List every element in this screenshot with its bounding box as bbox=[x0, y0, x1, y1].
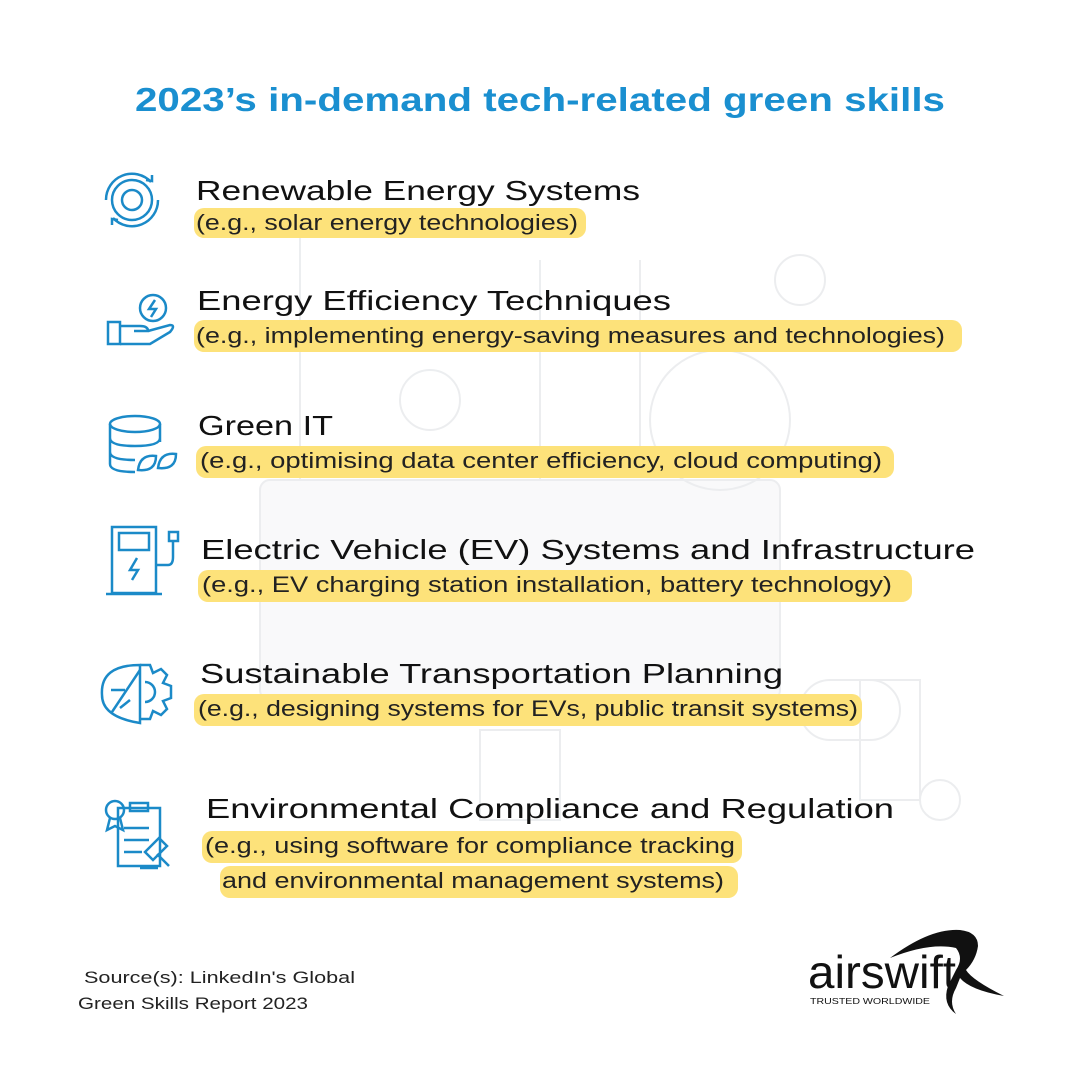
item: renewable energy: (e.g., solar energy technologies) bbox=[196, 210, 578, 235]
item: renewable energy bbox=[106, 174, 640, 238]
source text: Source(s): LinkedIn's Global bbox=[84, 968, 355, 987]
title: 2023’s in-demand tech-related green skills bbox=[135, 81, 945, 118]
icon: gear with leaf bbox=[106, 174, 158, 226]
item: environmental compliance: (e.g., using software for compliance tracking bbox=[205, 833, 735, 858]
source text: Green Skills Report 2023 bbox=[78, 994, 308, 1013]
source text bbox=[78, 968, 355, 1013]
item: environmental compliance bbox=[106, 793, 894, 898]
icon: leaf and gear bbox=[102, 665, 171, 723]
item: renewable energy: Renewable Energy Systems bbox=[196, 175, 640, 206]
item: environmental compliance: Environmental Compliance and Regulation bbox=[206, 793, 894, 824]
item: green IT: Green IT bbox=[198, 410, 333, 441]
logo: airswift: TRUSTED WORLDWIDE bbox=[810, 996, 930, 1006]
item: EV: (e.g., EV charging station installation, battery technology) bbox=[202, 572, 892, 597]
logo: airswift bbox=[808, 930, 1004, 1014]
item: sustainable transport bbox=[102, 658, 862, 726]
background sketch bbox=[260, 230, 960, 820]
logo: airswift: airswift bbox=[808, 946, 956, 998]
item: green IT: (e.g., optimising data center efficiency, cloud computing) bbox=[200, 448, 882, 473]
icon: charging station bbox=[106, 527, 178, 594]
icon: database with leaves bbox=[110, 416, 176, 472]
icon: clipboard with badge and gavel bbox=[106, 801, 169, 868]
item: sustainable transport: Sustainable Transportation Planning bbox=[200, 658, 783, 689]
item: EV bbox=[106, 527, 975, 602]
item: energy efficiency bbox=[108, 285, 962, 352]
item: energy efficiency: Energy Efficiency Techniques bbox=[197, 285, 671, 316]
item: green IT bbox=[110, 410, 894, 478]
item: EV: Electric Vehicle (EV) Systems and Infrastructure bbox=[201, 534, 975, 565]
item: environmental compliance: and environmental management systems) bbox=[222, 868, 724, 893]
icon: hand with bolt bbox=[108, 295, 173, 344]
item: sustainable transport: (e.g., designing systems for EVs, public transit systems) bbox=[198, 696, 858, 721]
item: energy efficiency: (e.g., implementing energy-saving measures and technologies) bbox=[196, 323, 945, 348]
